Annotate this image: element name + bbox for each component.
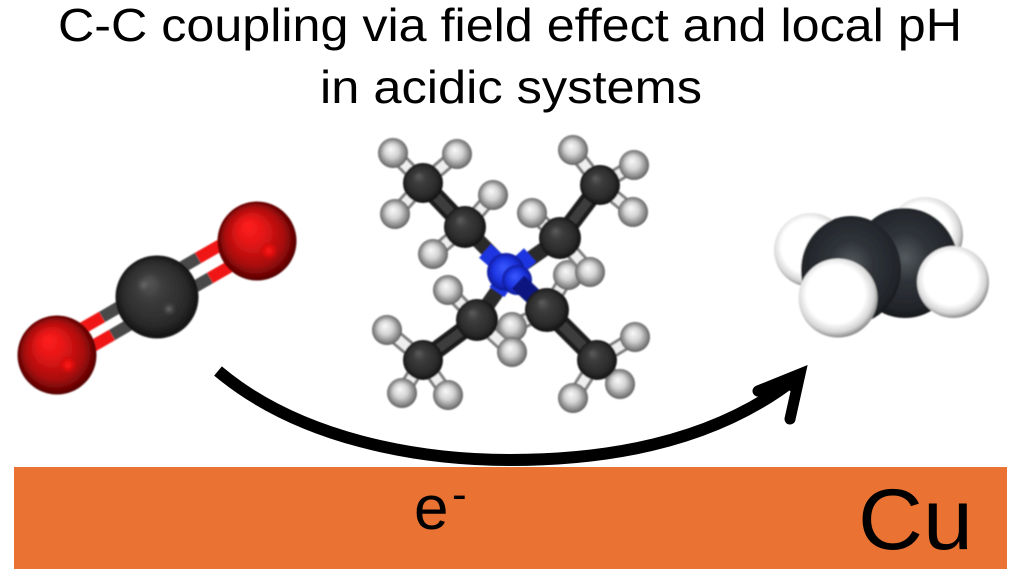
icon: CO2 molecule xyxy=(18,202,296,394)
title: in acidic systems xyxy=(320,61,702,113)
arm: upper right ethyl xyxy=(510,135,649,287)
electron label: - xyxy=(452,470,467,519)
rear hydrogens xyxy=(497,260,583,342)
copper electrode surface xyxy=(14,467,1007,569)
arrow: reaction path xyxy=(218,367,806,460)
icon: tetraethylammonium cation xyxy=(372,135,650,413)
icon: ethylene space-filling molecule xyxy=(774,197,989,338)
arm: lower right ethyl xyxy=(518,282,650,413)
arm: upper left ethyl xyxy=(378,138,510,273)
copper label: Cu xyxy=(858,472,973,568)
title xyxy=(58,0,962,113)
electron label xyxy=(414,470,467,543)
nitrogen centre xyxy=(485,251,532,295)
electron label: e xyxy=(414,474,448,543)
arm: lower left ethyl xyxy=(372,273,527,410)
title: C-C coupling via field effect and local pH xyxy=(58,0,962,51)
